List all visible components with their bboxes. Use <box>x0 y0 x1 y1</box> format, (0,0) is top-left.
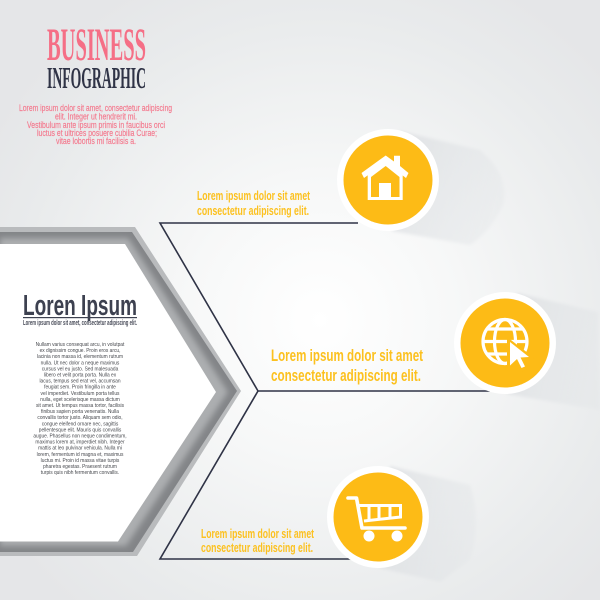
title <box>47 19 146 95</box>
callout: top text <box>197 189 311 218</box>
callout: bottom text <box>201 527 315 555</box>
body text block: libero et velit porta porta. Nulla ex <box>44 372 117 379</box>
callout: middle text: Lorem ipsum dolor sit amet <box>271 347 423 365</box>
body text block: Nullam varius consequat arcu, in volutpat <box>36 342 125 348</box>
body text block: sit amet. Ut tempus massa tortor, facilisis <box>36 403 124 409</box>
callout: middle text <box>271 347 423 385</box>
heading: Loren Ipsum <box>23 290 137 327</box>
intro text block: elit. Integer ut hendrerit mi. <box>55 112 137 122</box>
callout: top text: Lorem ipsum dolor sit amet <box>197 189 311 203</box>
intro text block: Lorem ipsum dolor sit amet, consectetur adipiscing <box>19 103 172 113</box>
text: INFOGRAPHIC <box>47 60 146 95</box>
body text block: cursus vel eu justo. Sed malesuada <box>42 366 118 373</box>
intro text block: vitae lobortis mi facilisis a. <box>56 136 136 146</box>
heading: Loren Ipsum: Lorem ipsum dolor sit amet, consectetur adipiscing elit. <box>23 318 137 327</box>
body text block: mattis at leo pulvinar vehicula. Nulla mi <box>38 445 122 452</box>
heading: Loren Ipsum: Loren Ipsum <box>23 290 137 322</box>
callout: bottom text: consectetur adipiscing elit. <box>201 541 313 555</box>
icon: shopping cart badge <box>327 466 476 582</box>
callout: middle text: consectetur adipiscing elit. <box>271 367 421 385</box>
body text block <box>33 342 127 476</box>
body text block: luctus mi. Proin id massa vitae turpis <box>41 458 120 464</box>
body text block: convallis tortor justo. Aliquam sem odio, <box>37 415 123 421</box>
body text block: lacinia non massa id, elementum rutrum <box>37 354 123 360</box>
body text block: pellentesque elit. Mauris quis convallis <box>39 427 122 434</box>
body text block: ex dignissim congue. Proin eros arcu, <box>40 348 120 354</box>
intro text block: luctus et ultrices posuere cubilia Curae; <box>37 128 157 138</box>
icon: home badge <box>337 129 504 245</box>
body text block: feugiat sem. Proin fringilla in ante <box>44 384 116 391</box>
connector lines <box>160 223 490 559</box>
body text block: congue eleifend ornare nec, sagittis <box>42 421 119 427</box>
body text block: nulla. Ut nec dolor a neque maximus <box>41 360 120 366</box>
body text block: vel imperdiet. Vestibulum porta tellus <box>41 391 120 397</box>
body text block: nulla, eget scelerisque massa dictum <box>40 397 120 403</box>
text: BUSINESS <box>47 19 146 71</box>
body text block: maximus lorem at, imperdiet nibh. Integer <box>35 439 125 446</box>
body text block: lacus, tempus sed erat vel, accumsan <box>39 378 121 385</box>
intro text block: Vestibulum ante ipsum primis in faucibus orci <box>27 120 165 130</box>
body text block: augue. Phasellus non neque condimentum, <box>33 433 127 440</box>
body text block: turpis quis nibh fermentum convallis. <box>41 470 119 476</box>
body text block: pharetra egestas. Praesent rutrum <box>43 464 117 470</box>
body text block: finibus sapien porta venenatis. Nulla <box>41 409 119 415</box>
icon: globe and cursor badge <box>454 292 600 410</box>
panel: hexagon arrow frame <box>0 227 241 556</box>
callout: bottom text: Lorem ipsum dolor sit amet <box>201 527 315 541</box>
callout: top text: consectetur adipiscing elit. <box>197 204 309 218</box>
body text block: lorem, fermentum id magna et, maximus <box>37 452 124 458</box>
intro text block <box>19 103 172 146</box>
